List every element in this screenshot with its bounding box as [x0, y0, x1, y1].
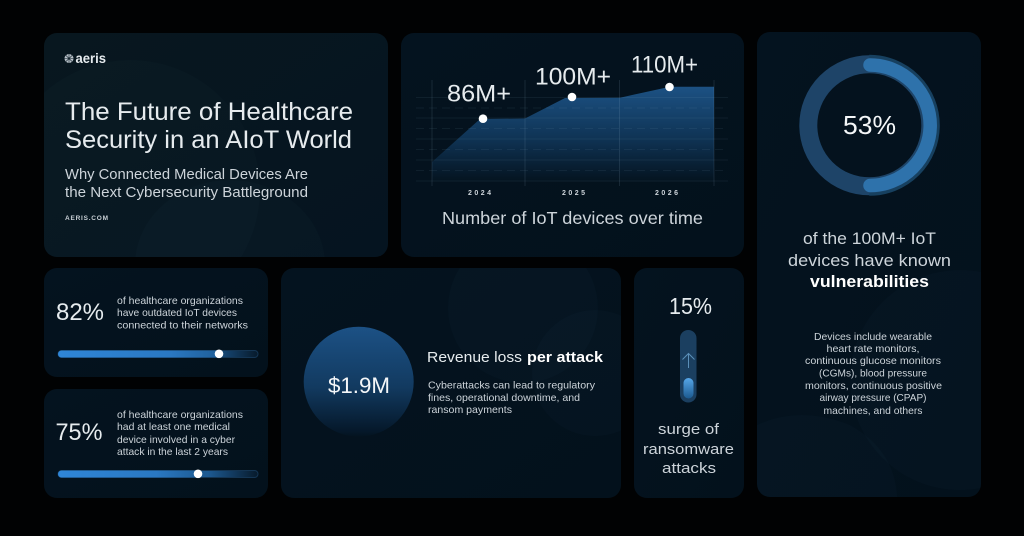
- stat value: 15%: [669, 293, 712, 319]
- area chart: [416, 52, 728, 197]
- stat description: of healthcare organizations: [117, 295, 243, 307]
- revenue description: Cyberattacks can lead to regulatory: [428, 380, 596, 392]
- donut chart: 53%: [843, 110, 896, 140]
- progress bar: [58, 470, 258, 478]
- device list text: [805, 331, 942, 417]
- device list text: airway pressure (CPAP): [820, 392, 926, 404]
- device list text: Devices include wearable: [814, 331, 932, 343]
- subtitle: the Next Cybersecurity Battleground: [65, 185, 308, 201]
- revenue heading: Revenue loss: [427, 349, 522, 366]
- revenue description: ransom payments: [428, 404, 512, 416]
- chart caption: Number of IoT devices over time: [442, 208, 703, 228]
- panel: vulnerabilities: [757, 32, 981, 497]
- revenue description: [428, 380, 596, 416]
- revenue heading: per attack: [527, 349, 604, 366]
- panel: 75% stat: [44, 389, 268, 498]
- progress bar: [58, 350, 258, 358]
- stat value: 82%: [56, 299, 104, 326]
- stat description: connected to their networks: [117, 320, 248, 332]
- stat description: [117, 295, 248, 332]
- logo: aeris: aeris: [76, 51, 106, 66]
- panel: IoT devices chart: [401, 33, 744, 257]
- panel: 82% stat: [44, 268, 268, 377]
- area chart: 86M+: [447, 80, 511, 108]
- heading: main title: Security in an AIoT World: [65, 126, 352, 154]
- website label: AERIS.COM: [65, 215, 108, 222]
- coin: revenue value: [304, 327, 414, 437]
- panel: title: [44, 33, 388, 257]
- device list text: monitors, continuous positive: [805, 380, 942, 392]
- device list text: machines, and others: [824, 405, 922, 417]
- area chart: 2024: [468, 190, 491, 197]
- stat description: [643, 421, 734, 477]
- vulnerabilities statement: devices have known: [788, 251, 951, 270]
- vulnerabilities statement: [788, 229, 951, 291]
- stat description: [117, 409, 243, 458]
- area chart: 2025: [562, 190, 585, 197]
- device list text: (CGMs), blood pressure: [819, 368, 927, 380]
- stat description: attack in the last 2 years: [117, 446, 228, 458]
- stat description: device involved in a cyber: [117, 434, 235, 446]
- stat description: ransomware: [643, 441, 734, 458]
- coin: revenue value: $1.9M: [328, 373, 390, 398]
- stat description: have outdated IoT devices: [117, 307, 237, 319]
- device list text: continuous glucose monitors: [805, 355, 941, 367]
- device list text: heart rate monitors,: [826, 343, 920, 355]
- revenue description: fines, operational downtime, and: [428, 392, 580, 404]
- area chart: 2026: [655, 190, 678, 197]
- heading: main title: [65, 98, 353, 154]
- heading: main title: The Future of Healthcare: [65, 98, 353, 126]
- panel: ransomware surge: [634, 268, 744, 498]
- revenue heading: [427, 349, 604, 366]
- area chart: 100M+: [535, 64, 611, 90]
- stat value: 75%: [56, 419, 102, 446]
- stat description: surge of: [658, 421, 720, 438]
- gauge with arrow: [680, 330, 696, 402]
- stat description: attacks: [662, 460, 716, 477]
- subtitle: [65, 167, 308, 201]
- vulnerabilities statement: vulnerabilities: [810, 272, 929, 291]
- subtitle: Why Connected Medical Devices Are: [65, 167, 308, 183]
- panel: revenue loss: [281, 268, 621, 498]
- stat description: of healthcare organizations: [117, 409, 243, 421]
- stat description: had at least one medical: [117, 421, 230, 433]
- vulnerabilities statement: of the 100M+ IoT: [803, 229, 936, 248]
- area chart: 110M+: [631, 52, 698, 79]
- donut chart: [808, 56, 938, 194]
